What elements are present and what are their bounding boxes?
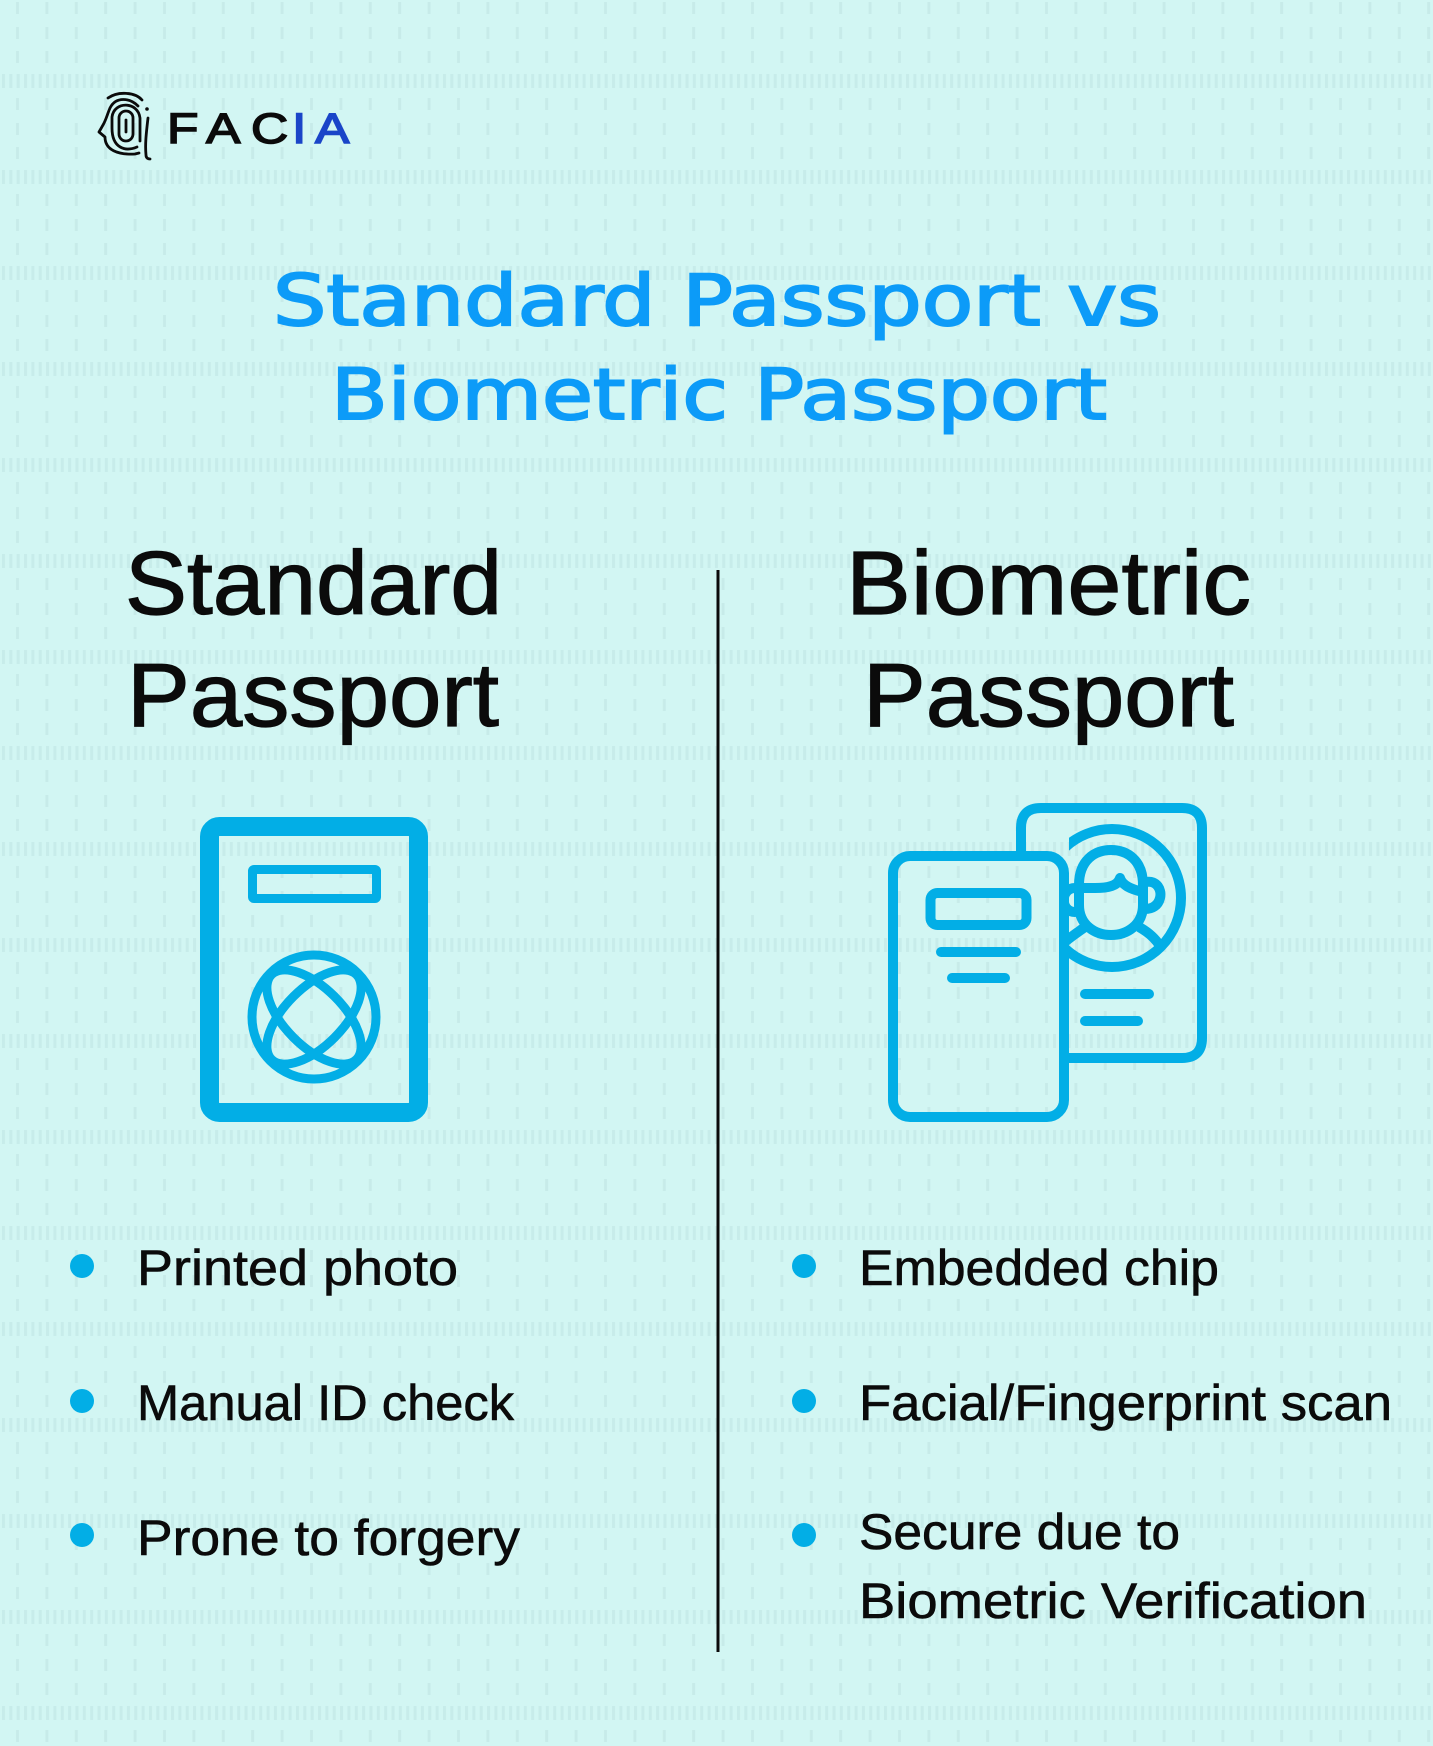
heading: Biometric Passport: Biometric: [846, 534, 1251, 634]
bullet item: secure due to biometric verification: Secure due to: [859, 1504, 1180, 1560]
icon: standard passport with globe: [210, 826, 418, 1112]
heading: Standard Passport: Standard: [125, 534, 502, 634]
heading: Standard Passport: Passport: [127, 646, 499, 746]
bullet item: secure due to biometric verification: Biometric Verification: [859, 1573, 1367, 1629]
title: [273, 260, 1161, 436]
title line 1: Standard Passport vs: [273, 260, 1161, 342]
panel: biometric passport: [792, 534, 1392, 1629]
title line 2: Biometric Passport: [331, 354, 1107, 436]
heading: Biometric Passport: [846, 534, 1251, 746]
heading: Standard Passport: [125, 534, 502, 746]
bullet item: embedded chip: Embedded chip: [859, 1240, 1219, 1296]
panel: standard passport: [70, 534, 520, 1566]
icon: biometric passport with face: [893, 808, 1202, 1117]
logo wordmark: FACIA: [167, 105, 350, 153]
icon: fingerprint head: [99, 93, 150, 159]
bullet item: facial/fingerprint scan: Facial/Fingerprint scan: [859, 1375, 1392, 1431]
bullet item: manual ID check: Manual ID check: [137, 1375, 515, 1431]
bullet item: prone to forgery: Prone to forgery: [137, 1510, 520, 1566]
list: biometric passport features: [792, 1240, 1392, 1629]
divider: [716, 570, 720, 1652]
bullet item: printed photo: Printed photo: [137, 1240, 458, 1296]
heading: Biometric Passport: Passport: [863, 646, 1234, 746]
logo: Facia: [99, 93, 350, 159]
list: standard passport features: [70, 1240, 520, 1566]
bullet item: secure due to biometric verification: [792, 1504, 1367, 1629]
